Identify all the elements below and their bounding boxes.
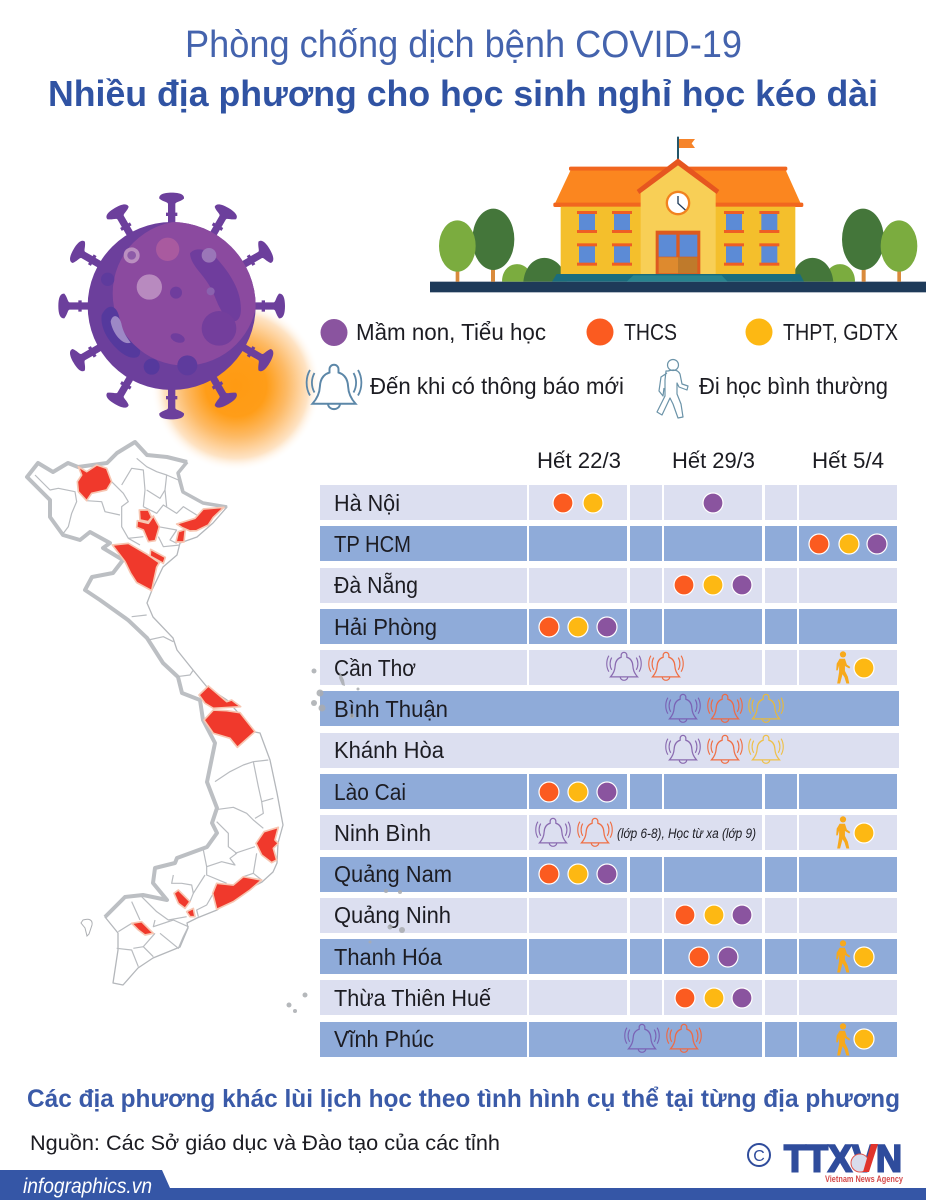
row: Thừa Thiên Huế: Thừa Thiên Huế [334,985,491,1011]
row: Hà Nội [320,485,897,520]
subtitle line: Phòng chống dịch bệnh COVID-19 [185,24,742,66]
flag [677,137,695,160]
row: Vĩnh Phúc: Vĩnh Phúc [334,1026,434,1052]
table [320,485,899,1057]
red provinces south [132,827,278,935]
row: Cần Thơ: Cần Thơ [334,655,416,681]
row: Thừa Thiên Huế [320,980,897,1015]
footnote heading: Các địa phương khác lùi lịch học theo tình hình cụ thể tại từng địa phương [27,1085,900,1113]
door [656,231,700,274]
logo: TTXVN: TTXVN [784,1138,902,1180]
map islands [81,668,405,1013]
row: Thanh Hóa: Thanh Hóa [334,944,442,970]
footer bar [0,1170,926,1200]
row: Bình Thuận [320,691,899,726]
row: Hà Nội: Hà Nội [334,490,400,516]
legend [307,318,898,418]
row: TP HCM [320,526,897,561]
row: Ninh Bình: (lớp 6-8), Học từ xa (lớp 9) [617,826,756,841]
red provinces north [77,465,255,747]
ground [430,282,926,292]
trees right [792,209,917,282]
row: Lào Cai [320,774,897,809]
legend: normal school: Đi học bình thường [699,373,888,399]
logo: TTXVN: C [753,1148,765,1165]
source: Nguồn: Các Sở giáo dục và Đào tạo của các tỉnh [30,1132,500,1155]
title [48,24,878,114]
legend: until further notice [307,365,624,409]
legend: normal school [657,360,888,418]
row: Lào Cai: Lào Cai [334,779,406,805]
row: Thanh Hóa [320,939,897,974]
icon: school building with trees [430,137,926,292]
row: Khánh Hòa [320,733,899,768]
map of Vietnam [27,442,283,985]
row: Đà Nẵng: Đà Nẵng [334,571,418,598]
legend: preschool and primary: Mầm non, Tiểu học [356,319,546,345]
row: Quảng Nam [320,857,897,892]
row: Đà Nẵng [320,568,897,603]
main heading: Nhiều địa phương cho học sinh nghỉ học kéo dài [48,73,878,114]
table column headers: Hết 29/3 [672,448,755,473]
roof [555,170,801,203]
table column headers: Hết 5/4 [812,448,884,473]
icon: orange glow behind virus [151,301,321,471]
map landmass [27,442,283,985]
row: Quảng Ninh [320,898,897,933]
table column headers [537,448,884,473]
row: Bình Thuận: Bình Thuận [334,696,448,722]
row: Hải Phòng [320,609,897,644]
legend: lower secondary [586,318,677,346]
row: Ninh Bình [320,815,897,850]
legend: until further notice: Đến khi có thông báo mới [370,373,624,399]
row: Cần Thơ [320,650,897,685]
province borders south [117,760,273,967]
icon: coronavirus [58,193,285,419]
legend: upper secondary [746,318,898,346]
steps [552,274,804,282]
row: Ninh Bình: Ninh Bình [334,820,431,846]
row: Khánh Hòa: Khánh Hòa [334,737,444,763]
trees left [439,209,567,282]
logo: TTXVN [748,1138,904,1185]
logo: TTXVN: Vietnam News Agency [825,1174,904,1185]
table column headers: Hết 22/3 [537,448,621,473]
province borders north [35,458,197,677]
row: Quảng Nam: Quảng Nam [334,861,452,887]
row: Vĩnh Phúc [320,1022,897,1057]
thick land border [27,442,217,917]
windows [577,211,779,266]
walls [561,207,795,275]
row: Quảng Ninh: Quảng Ninh [334,902,451,928]
footer bar: infographics.vn [23,1175,152,1198]
legend: lower secondary: THCS [624,319,677,345]
clock [666,191,690,215]
row: TP HCM: TP HCM [334,531,411,557]
legend: upper secondary: THPT, GDTX [783,319,898,345]
row: Hải Phòng: Hải Phòng [334,614,437,640]
